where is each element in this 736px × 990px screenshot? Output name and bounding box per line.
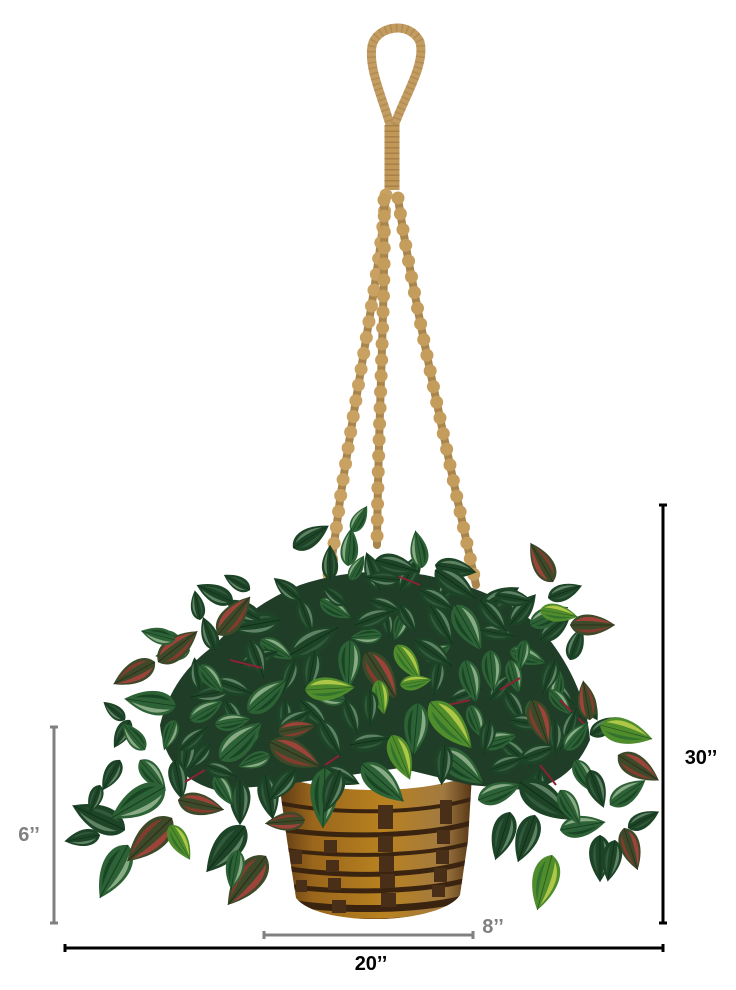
right strand <box>398 198 476 585</box>
outer right leaves <box>474 538 665 913</box>
top leaves <box>221 503 483 608</box>
dimension: width 20 inches <box>65 944 663 975</box>
left strand <box>322 195 386 622</box>
dimension: basket height 6 inches: 6’’ <box>18 824 40 846</box>
middle strand <box>377 200 384 545</box>
rope hanger <box>322 28 476 622</box>
dimension: height 30 inches: 30’’ <box>685 747 717 769</box>
dimension: height 30 inches <box>659 505 717 923</box>
plant foliage <box>63 503 665 914</box>
dimension: basket width 8 inches: 8’’ <box>482 916 504 938</box>
basket <box>281 781 472 919</box>
basket straps <box>290 800 452 913</box>
dark foliage mass <box>160 572 590 790</box>
dimension: basket width 8 inches <box>264 916 504 939</box>
back leaves <box>95 545 624 825</box>
rope knot <box>384 125 400 190</box>
stems <box>185 575 585 785</box>
basket weave bands <box>275 798 475 922</box>
outer left leaves <box>63 577 277 914</box>
dimension: width 20 inches: 20’’ <box>355 953 387 975</box>
dimension: basket height 6 inches <box>18 727 58 923</box>
front leaves <box>211 594 514 833</box>
mid-layer leaves filling the mass <box>175 580 576 784</box>
rope loop <box>371 28 421 132</box>
